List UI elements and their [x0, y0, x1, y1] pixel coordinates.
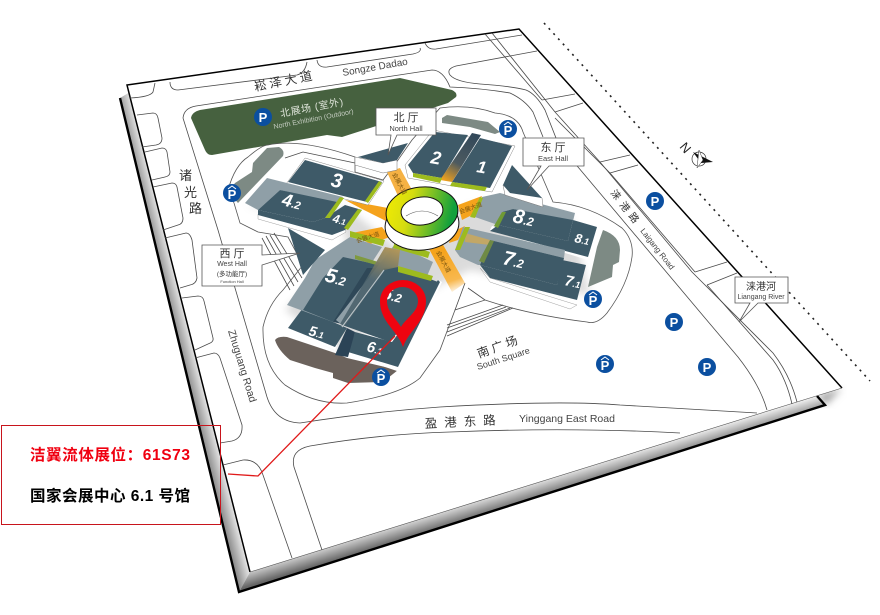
north exhibition label: 北展场 (室外) — [279, 95, 345, 120]
north exhibition label: North Exhibition (Outdoor) — [273, 109, 354, 131]
label: west hall: 西 厅 — [219, 248, 245, 260]
avenue labels: 会展大道 — [434, 249, 453, 274]
label: west hall: West Hall — [217, 261, 247, 268]
halls 2 and 1 — [405, 130, 515, 192]
label: west hall — [202, 245, 300, 286]
label: liangang river — [735, 277, 788, 322]
road name: songze — [253, 57, 409, 94]
road name: songze: 崧泽大道 — [253, 68, 316, 94]
label: north hall: 北 厅 — [393, 111, 419, 124]
dotted river line — [544, 23, 870, 381]
callout box — [2, 426, 220, 524]
red location pin — [380, 280, 426, 347]
south square label: 南广场 — [475, 331, 522, 361]
hall number 3: 3 — [329, 169, 344, 193]
label: west hall: Function Hall — [220, 279, 244, 284]
road outlines — [130, 33, 797, 558]
north exhibition area — [191, 78, 456, 155]
shadow under halls — [245, 205, 590, 350]
avenue labels — [355, 171, 483, 274]
road name: songze: Songze Dadao — [342, 57, 409, 79]
road name: laigang: 路 — [626, 210, 642, 226]
hall 8 — [470, 193, 597, 260]
label: east hall — [523, 138, 584, 190]
hall number 5.1: 5.1 — [307, 322, 326, 342]
central ring — [383, 183, 461, 254]
road name: zhuguang: Zhuguang Road — [225, 328, 259, 404]
road name: laigang: 港 — [617, 199, 632, 215]
compass: N — [677, 139, 694, 156]
hall number 4.1: 4.1 — [330, 211, 348, 228]
parking icons: P — [703, 360, 712, 375]
parking icons: P — [504, 123, 513, 138]
hall 7 — [455, 227, 586, 309]
plaza contour — [228, 107, 632, 403]
road name: zhuguang: 光 — [184, 185, 197, 200]
road name: yinggang: 盈港东路 — [424, 412, 503, 431]
label: north hall — [376, 108, 436, 155]
parking icons: P — [651, 194, 660, 209]
parking garage blobs — [228, 115, 620, 383]
callout: booth number: 洁翼流体展位：61S73 — [30, 445, 190, 464]
label: west hall: (多功能厅) — [217, 269, 247, 278]
hall number 5.2: 5.2 — [323, 265, 349, 291]
hall 6 — [335, 241, 442, 372]
road name: zhuguang: 诸 — [179, 168, 192, 183]
hall number 6.2: 6.2 — [380, 282, 405, 307]
parking icons: P — [377, 371, 386, 386]
north hall building — [355, 143, 408, 173]
parking icons: P — [589, 293, 598, 308]
label: east hall: 东 厅 — [540, 141, 566, 154]
east hall building — [503, 165, 543, 207]
south square label — [475, 331, 531, 372]
hall number 8.1: 8.1 — [573, 230, 591, 248]
hall number 7.1: 7.1 — [563, 272, 582, 292]
parking icons: P — [601, 358, 610, 373]
red leader line — [228, 336, 395, 476]
parking icons: P — [670, 315, 679, 330]
paper back sheet with shadow — [120, 92, 842, 592]
hall number 7.2: 7.2 — [501, 247, 527, 273]
callout: hall name: 国家会展中心 6.1 号馆 — [30, 486, 190, 505]
road name: zhuguang — [179, 168, 259, 404]
west hall building — [288, 228, 325, 275]
label: north hall: North Hall — [389, 124, 423, 133]
stair lines — [262, 152, 513, 336]
map sheet — [127, 29, 842, 572]
avenue labels: 会展大道 — [458, 200, 483, 216]
label: east hall: East Hall — [538, 154, 568, 163]
hall 3 — [286, 158, 384, 205]
hall number 2: 2 — [428, 147, 443, 169]
hall number 1: 1 — [475, 157, 488, 178]
hall number 4.2: 4.2 — [279, 189, 304, 214]
road name: zhuguang: 路 — [189, 201, 202, 216]
road name: laigang: 涞 — [608, 187, 623, 203]
hall number 6.1: 6.1 — [365, 338, 385, 359]
road name: yinggang — [424, 412, 615, 431]
orange avenues — [345, 168, 482, 292]
label: liangang river: 涞港河 — [746, 281, 776, 293]
road name: yinggang: Yinggang East Road — [519, 413, 615, 425]
hall number 8.2: 8.2 — [511, 205, 537, 231]
parking icons — [223, 108, 716, 386]
parking icons: P — [228, 187, 237, 202]
label: liangang river: Liangang River — [737, 294, 785, 301]
north exhibition label — [273, 95, 354, 131]
hall 4 — [245, 178, 362, 240]
hall 5 — [287, 231, 388, 350]
parking icons: P — [259, 110, 268, 125]
road name: laigang: Laigang Road — [638, 227, 676, 271]
road name: laigang — [608, 187, 676, 271]
south square label: South Square — [476, 345, 531, 372]
avenue labels: 会展大道 — [355, 230, 380, 245]
avenue labels: 会展大道 — [390, 171, 409, 196]
compass — [677, 139, 713, 168]
